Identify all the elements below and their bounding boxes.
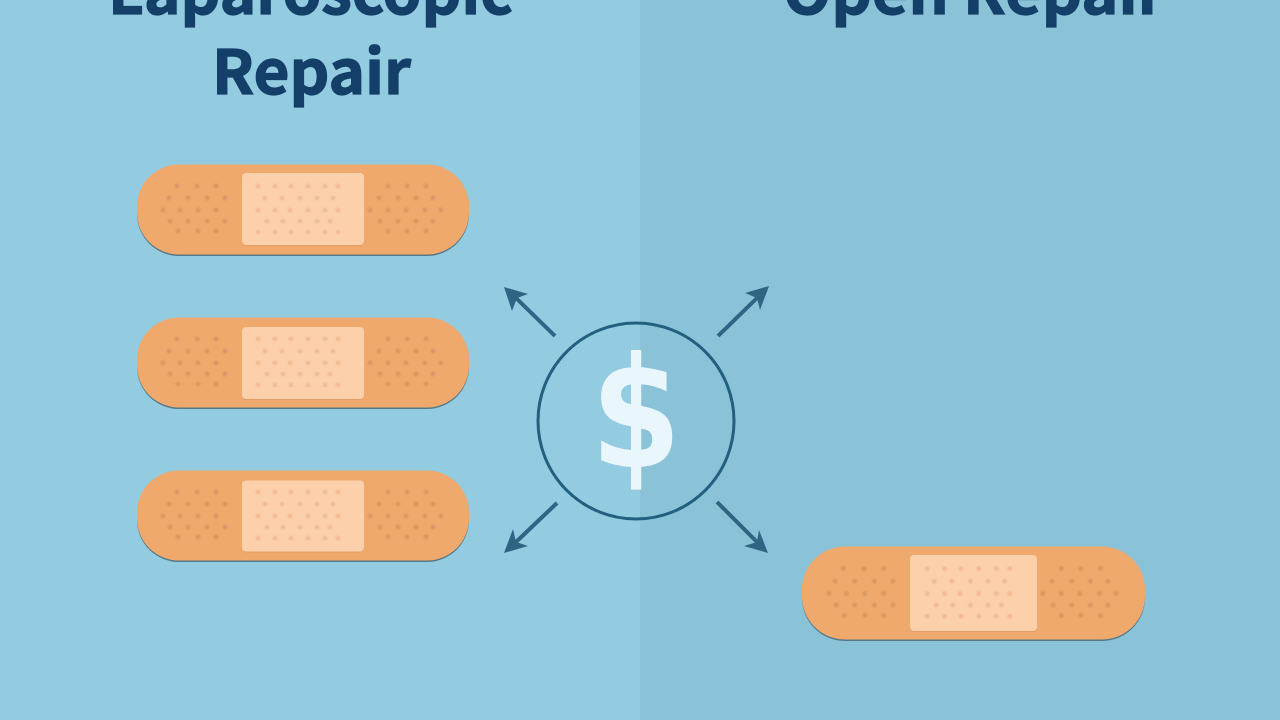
arrow: down left xyxy=(504,503,557,553)
icon: bandage 3 xyxy=(137,470,469,562)
heading: laparoscopic repair xyxy=(108,0,513,112)
arrow: down right xyxy=(717,502,768,553)
arrow: up left xyxy=(504,287,555,336)
icon: bandage 2 xyxy=(137,318,469,409)
icon: bandage 4 xyxy=(802,546,1145,641)
icon: bandage 1 xyxy=(137,164,469,256)
icon: dollar circle xyxy=(538,323,734,519)
icon: dollar circle: $ xyxy=(591,324,681,504)
panel: open repair xyxy=(640,0,1280,720)
arrow: up right xyxy=(718,286,769,336)
panel: laparoscopic repair xyxy=(0,0,640,720)
heading: laparoscopic repair: Repair xyxy=(212,23,411,112)
